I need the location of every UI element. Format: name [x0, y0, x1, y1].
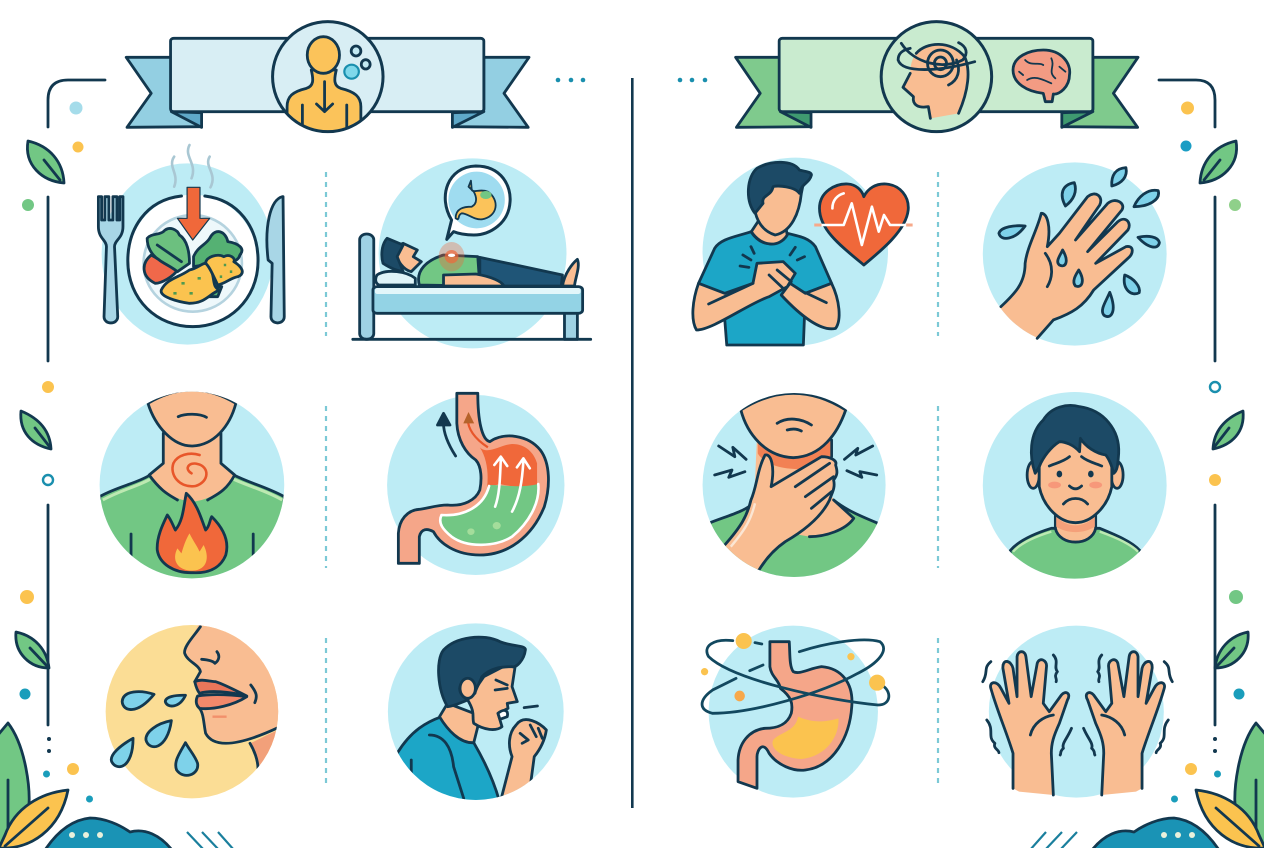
right leaves: [1200, 141, 1248, 668]
icon: stomach with rising acid: [387, 393, 564, 575]
icon: large meal on plate with fork and knife: [98, 145, 284, 345]
dotted divider: right column row 2: [937, 406, 939, 568]
bottom left corner foliage: [0, 723, 234, 848]
dotted divider: left column row 2: [325, 406, 327, 568]
dotted divider: left column row 3: [325, 638, 327, 785]
panel: left top quadrant icons: [98, 22, 591, 348]
dotted divider: right column row 3: [937, 638, 939, 785]
bottom right corner foliage: [1030, 723, 1264, 848]
icon: man coughing: [388, 623, 564, 803]
left trembling hand: [983, 652, 1071, 795]
dotted divider: right column row 1: [937, 172, 939, 336]
icon: sour taste mouth with droplets: [106, 620, 282, 798]
left leaves: [16, 141, 64, 668]
panel: left bottom quadrant icons: [100, 390, 564, 803]
icon: brain: [1013, 50, 1070, 102]
left ribbon banner: [126, 22, 529, 133]
icon: dizzy head: [898, 43, 975, 118]
icon: person with downward arrow: [287, 37, 370, 133]
icon: sweaty hand: [983, 162, 1167, 346]
icon: dizzy stomach with orbit rings: [701, 626, 889, 798]
center divider line: [631, 78, 634, 808]
right decorative border: [678, 78, 1244, 802]
right ribbon banner: [736, 22, 1138, 132]
icon: trembling hands: [983, 626, 1172, 798]
icon: sad boy face: [983, 392, 1167, 587]
left decorative border: [20, 78, 585, 802]
panel: right bottom quadrant icons: [701, 392, 1172, 798]
icon: hand on sore throat: [703, 393, 886, 587]
icon: burning throat and chest: [100, 390, 284, 587]
icon: man holding chest with heart: [693, 158, 913, 346]
icon: person lying in bed after eating: [353, 158, 591, 348]
right trembling hand: [1084, 652, 1172, 795]
dotted divider: left column row 1: [325, 172, 327, 336]
speech bubble with stomach: [445, 166, 510, 239]
panel: right top quadrant icons: [693, 22, 1167, 346]
